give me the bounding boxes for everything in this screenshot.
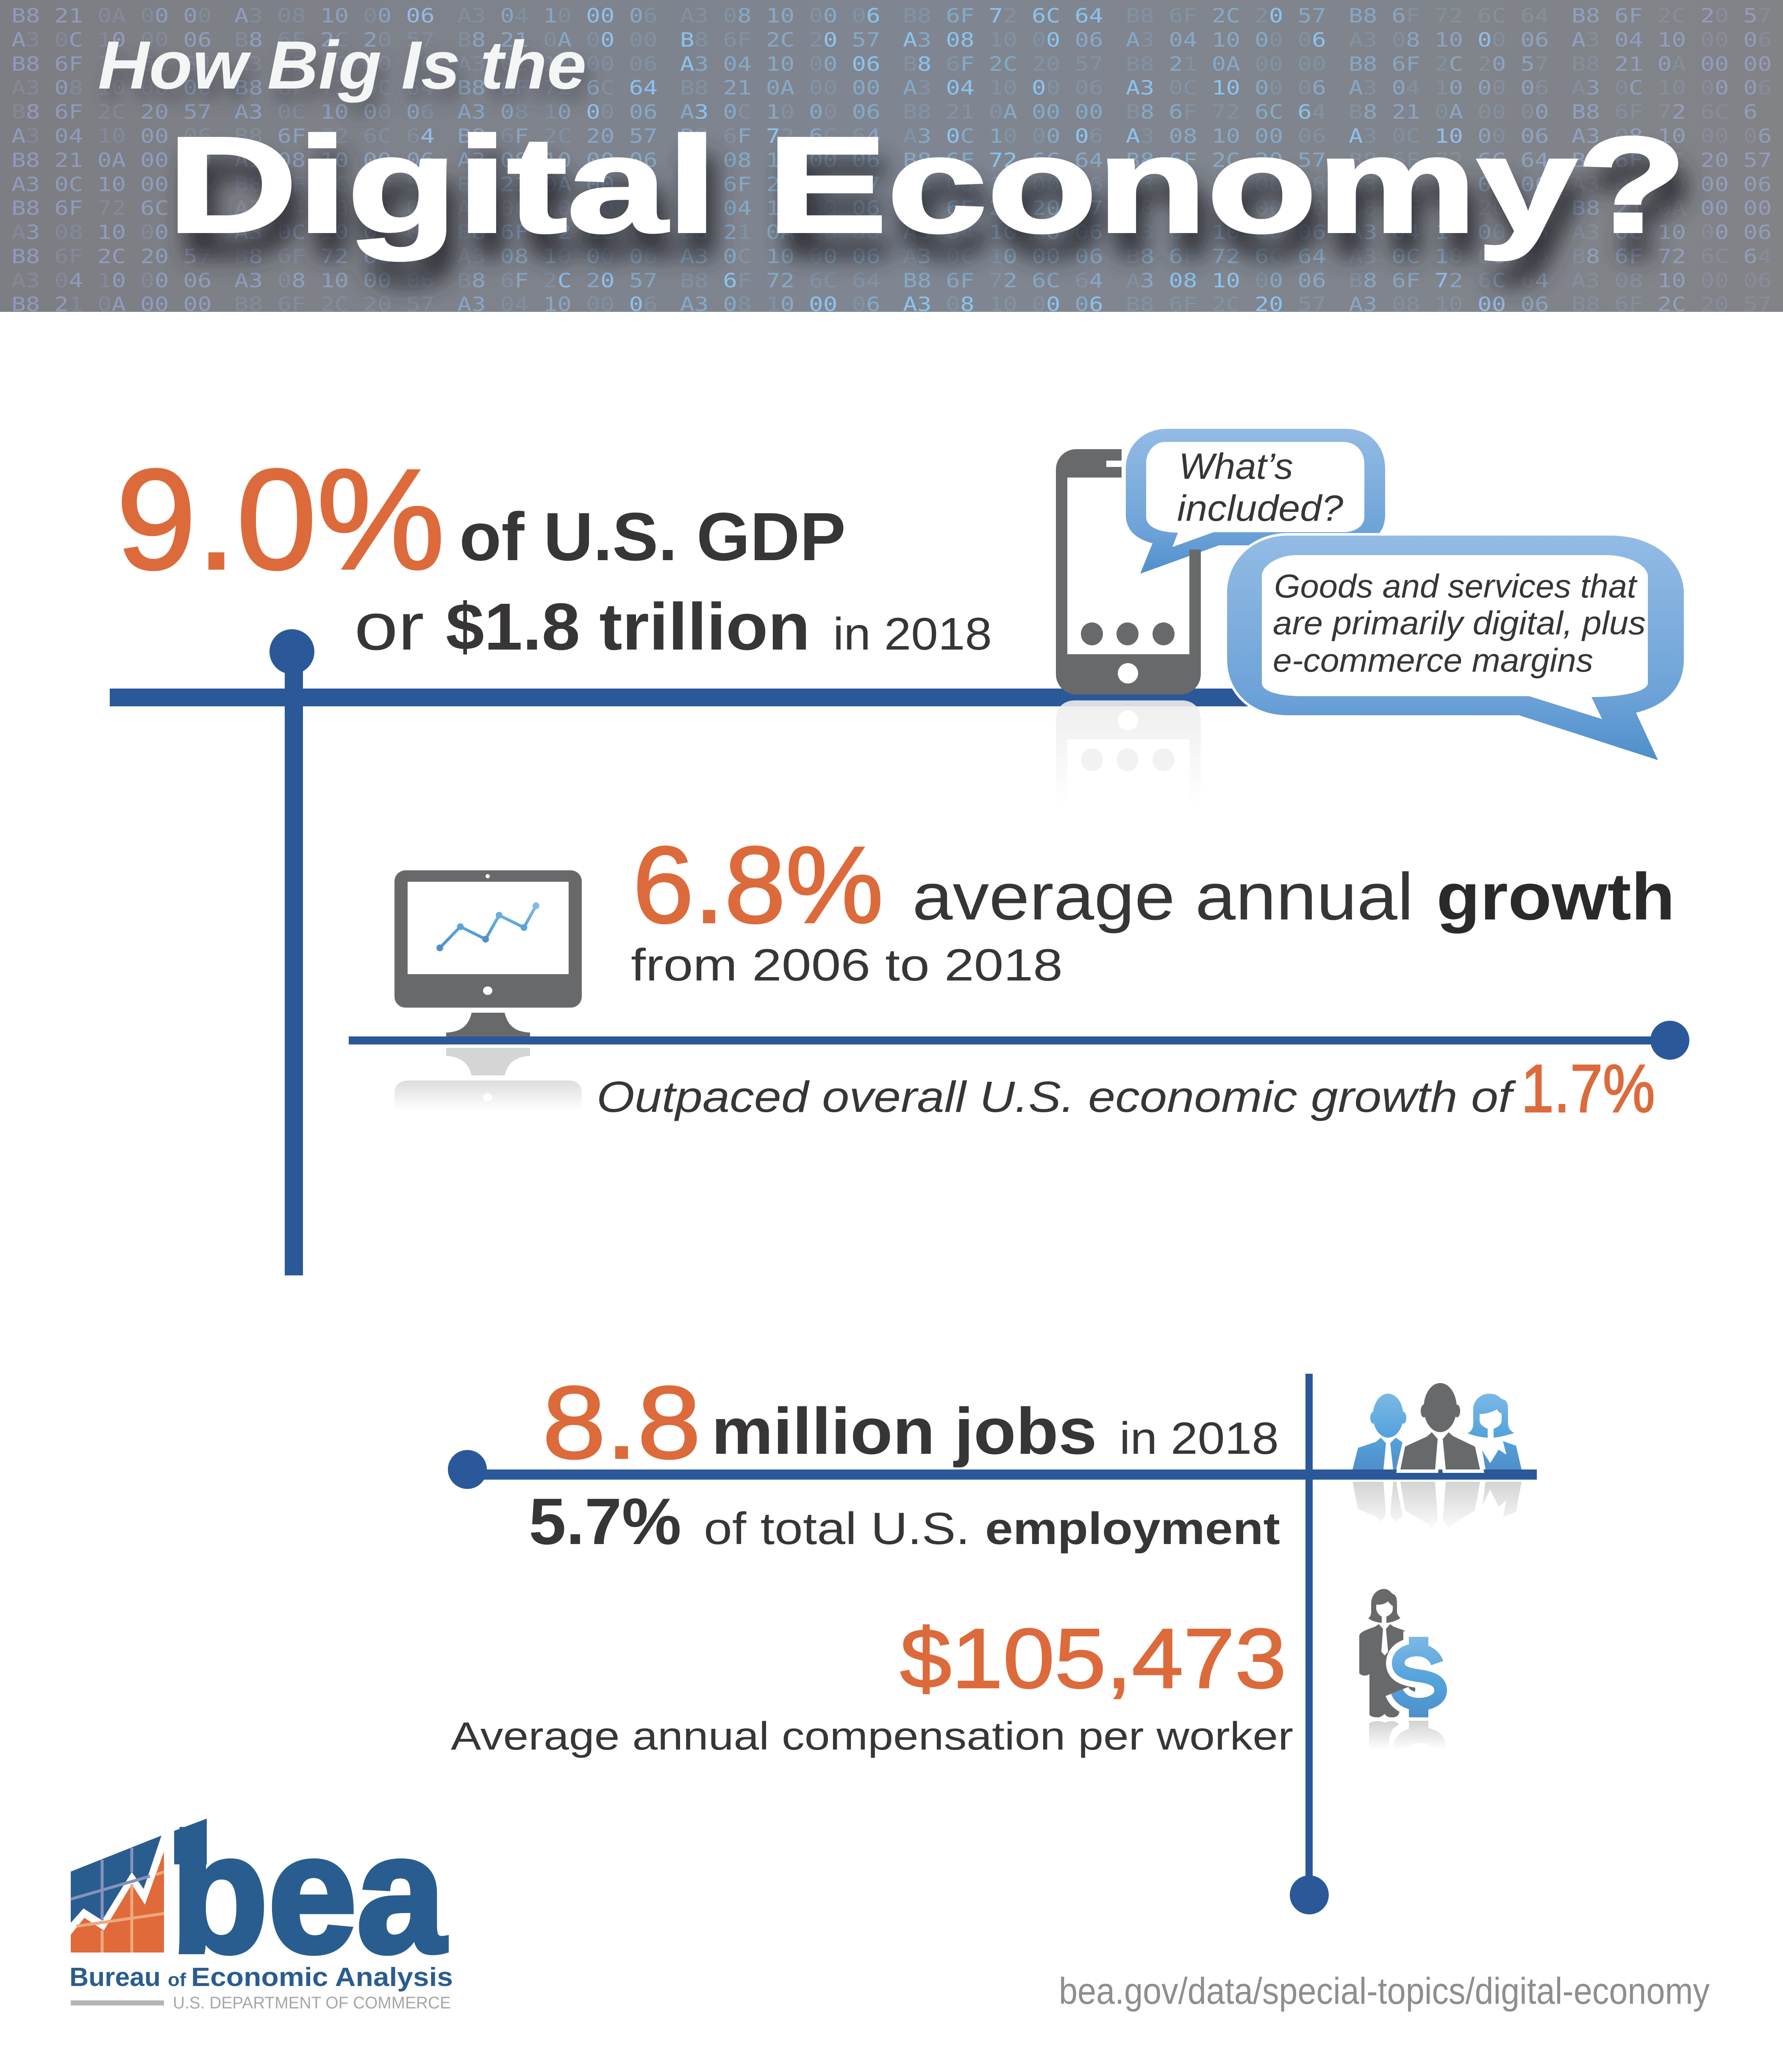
logo name: Economic Analysis [191, 1963, 453, 1992]
hex code background pattern: B8 6F 72 6C 6 [1572, 101, 1758, 124]
title: Digital Economy?: Digital Economy? [167, 109, 1687, 261]
hex code background pattern: B8 6F 2C 20 57 [234, 173, 435, 196]
hex code background pattern: B8 21 0A 00 00 [1349, 101, 1549, 124]
hex code background pattern: B8 6F 2C 20 57 [903, 197, 1103, 220]
hex code background pattern: B8 21 0A 00 00 [11, 293, 212, 316]
line chart on screen [436, 903, 539, 951]
timeline structure: top horizontal and vertical rule with dot [110, 629, 1262, 1275]
hex code background pattern: A3 08 10 00 06 [234, 5, 435, 28]
hex code background pattern: A3 04 10 00 06 [680, 53, 880, 76]
hex code background pattern: A3 0C 10 00 06 [457, 197, 658, 220]
growth timeline rule with dot [349, 1021, 1689, 1060]
hex code background pattern: A3 0C 10 00 06 [1126, 221, 1326, 244]
hex code background pattern: A3 08 10 00 06 [1349, 173, 1549, 196]
phone reflection [1056, 700, 1201, 811]
hex code background pattern: B8 21 0A 00 00 [680, 221, 880, 244]
speech bubble: Goods and services: e-commerce margins [1273, 642, 1593, 679]
hex code background pattern: A3 0C 10 00 06 [457, 53, 658, 76]
hex code background pattern: A3 08 10 00 06 [680, 149, 880, 172]
hex code background pattern: B8 6F 72 6C 64 [1349, 269, 1549, 292]
logo name [69, 1963, 453, 1992]
text: Outpaced overall U.S. economic growth of 1.7% [597, 1050, 1655, 1126]
hex code background pattern: A3 08 10 00 06 [234, 269, 435, 292]
icon: smartphone with reflection [1056, 445, 1206, 811]
stat: 6.8% average annual growth [633, 824, 1675, 946]
text: from 2006 to 2018: from 2006 to 2018 [631, 939, 1063, 990]
hex code background pattern: A3 04 10 00 06 [234, 197, 435, 220]
hex code background pattern: A3 0C 10 00 06 [234, 221, 435, 244]
hex code background pattern: A3 08 10 00 06 [234, 53, 435, 76]
logo name: of [168, 1969, 186, 1990]
woman [1467, 1394, 1522, 1469]
hex code background pattern: B8 21 0A 00 00 [1126, 53, 1326, 76]
stat: 9.0% of U.S. GDP [116, 440, 846, 599]
stat: 8.8 million jobs in 2018 [542, 1365, 1279, 1480]
icon: three business people with reflection [1353, 1383, 1522, 1529]
hex code background pattern: A3 04 10 00 06 [457, 293, 658, 316]
hex code background pattern: B8 6F 2C 20 57 [457, 269, 658, 292]
hex code background pattern: B8 6F 72 6C 64 [1349, 149, 1549, 172]
hex code background pattern: B8 6F 2C 20 57 [234, 29, 435, 52]
hex code background pattern: A3 04 10 00 06 [1126, 173, 1326, 196]
hex code background pattern: A3 08 10 00 06 [1126, 269, 1326, 292]
hex code background pattern: B8 21 0A 00 00 [680, 77, 880, 100]
hex code background pattern: B8 21 0A 00 00 [457, 29, 658, 52]
hex code background pattern: A3 08 10 00 06 [234, 149, 435, 172]
footer url: bea.gov/data/special-topics/digital-economy [1059, 1970, 1710, 2012]
hex code background pattern: A3 08 10 00 06 [457, 245, 658, 268]
hex code background pattern: A3 0C 10 00 06 [1349, 125, 1549, 148]
hex code background pattern: A3 0C 10 00 06 [903, 245, 1103, 268]
stat: 5.7% of total U.S. employment: employment [985, 1503, 1280, 1554]
hex code background pattern: A3 08 10 00 06 [680, 293, 880, 316]
hex code background pattern: A3 04 10 00 06 [1126, 29, 1326, 52]
hex code background pattern: B8 6F 72 6C 64 [1126, 245, 1326, 268]
hex code background pattern: A3 04 10 00 06 [1349, 77, 1549, 100]
hex code background pattern: B8 6F 72 6C 64 [680, 125, 880, 148]
text: Outpaced overall U.S. economic growth of 1.7%: 1.7% [1521, 1050, 1655, 1126]
hex code background pattern: B8 6F 2C 20 57 [1572, 149, 1772, 172]
subtitle: How Big Is the: How Big Is the [98, 27, 586, 103]
people reflection [1353, 1482, 1522, 1529]
logo: Bureau of Economic Analysis [69, 1800, 453, 2012]
stat: 6.8% average annual growth: average annual [912, 860, 1414, 934]
left man [1353, 1394, 1406, 1469]
hex code background pattern: B8 6F 72 6C 64 [1349, 5, 1549, 28]
stat: 8.8 million jobs in 2018: million jobs [711, 1394, 1097, 1468]
hex code background pattern: A3 0C 10 00 06 [11, 173, 212, 196]
hex code background pattern: A3 04 10 00 06 [1349, 221, 1549, 244]
header banner [0, 0, 1783, 316]
hex code background pattern: B8 6F 2C 20 57 [1349, 197, 1549, 220]
hex code background pattern: B8 21 0A 00 00 [457, 173, 658, 196]
hex code background pattern: A3 08 10 00 06 [1126, 125, 1326, 148]
hex code background pattern: A3 08 10 00 06 [11, 221, 212, 244]
hex code background pattern: A3 0C 10 00 06 [11, 29, 212, 52]
hex code background pattern: A3 08 10 00 06 [680, 5, 880, 28]
logo wordmark bea: bea [171, 1800, 446, 1988]
hex code background pattern: A3 04 10 00 06 [457, 5, 658, 28]
hex code background pattern: A3 04 10 00 06 [11, 269, 212, 292]
speech bubble: What's included?: included? [1177, 488, 1343, 529]
hex code background pattern: A3 08 10 00 06 [457, 149, 658, 172]
hex code background pattern: B8 21 0A 00 00 [11, 5, 212, 28]
hex code background pattern: A3 08 10 00 06 [903, 29, 1103, 52]
hex code background pattern [11, 5, 1772, 316]
hex code background pattern: B8 6F 72 6C 64 [1126, 101, 1326, 124]
of U.S. GDP label: of U.S. GDP [459, 499, 846, 575]
text: Outpaced overall U.S. economic growth of 1.7%: Outpaced overall U.S. economic growth of [597, 1072, 1516, 1121]
stat: 8.8 million jobs in 2018: 8.8 [542, 1365, 701, 1480]
hex code background pattern: A3 08 10 00 06 [457, 101, 658, 124]
hex code background pattern: A3 08 10 00 06 [1572, 269, 1772, 292]
hex code background pattern: B8 6F 2C 20 57 [1126, 5, 1326, 28]
speech bubble: What's included?: What’s [1179, 446, 1293, 487]
hex code background pattern: B8 6F 72 6C 64 [1572, 245, 1772, 268]
hex code background pattern: A3 0C 10 00 06 [903, 125, 1103, 148]
hex code background pattern: B8 6F 2C 20 57 [457, 125, 658, 148]
hex code background pattern: B8 6F 72 6C 64 [11, 197, 212, 220]
hex code background pattern: B8 21 0A 00 00 [11, 149, 212, 172]
hex code background pattern: B8 21 0A 00 00 [1572, 53, 1772, 76]
hex code background pattern: A3 08 10 00 06 [11, 77, 212, 100]
stat: or $1.8 trillion in 2018 [354, 589, 992, 664]
hex code background pattern: B8 6F 72 6C 64 [11, 53, 212, 76]
hex code background pattern: A3 08 10 00 06 [1349, 29, 1549, 52]
logo chart mark [71, 1836, 164, 1953]
hex code background pattern: A3 0C 10 00 06 [234, 101, 435, 124]
hex code background pattern: A3 04 10 00 06 [903, 221, 1103, 244]
center man [1400, 1383, 1480, 1469]
hex code background pattern: B8 6F 72 6C 64 [234, 125, 435, 148]
hex code background pattern: B8 6F 72 6C 64 [680, 269, 880, 292]
hex code background pattern: B8 6F 2C 20 57 [1572, 293, 1772, 316]
hex code background pattern: A3 08 10 00 06 [1572, 173, 1772, 196]
hex code background pattern: B8 6F 2C 20 57 [903, 53, 1103, 76]
hex code background pattern: B8 6F 2C 20 57 [1126, 149, 1326, 172]
speech bubble: Goods and services: are primarily digital, plus [1273, 604, 1646, 642]
hex code background pattern: A3 0C 10 00 06 [1349, 245, 1549, 268]
logo department line: U.S. DEPARTMENT OF COMMERCE [173, 1994, 451, 2012]
hex code background pattern: B8 6F 2C 20 57 [680, 173, 880, 196]
stat: 6.8% average annual growth: 6.8% [633, 824, 883, 946]
hex code background pattern: B8 6F 2C 20 57 [234, 293, 435, 316]
hex code background pattern: A3 04 10 00 06 [903, 77, 1103, 100]
hex code background pattern: B8 6F 72 6C 64 [903, 269, 1103, 292]
hex code background pattern: A3 08 10 00 06 [903, 173, 1103, 196]
stat: or $1.8 trillion in 2018: or [354, 589, 424, 664]
stat: $105,473: $105,473 [900, 1611, 1286, 1706]
jobs timeline rules with dots [448, 1374, 1537, 1914]
reflection [1369, 1721, 1446, 1750]
stat: 5.7% of total U.S. employment [529, 1485, 1280, 1558]
hex code background pattern: A3 08 10 00 06 [903, 293, 1103, 316]
hex code background pattern: B8 6F 2C 20 57 [1572, 5, 1772, 28]
hex code background pattern: B8 6F 72 6C 64 [457, 221, 658, 244]
hex code background pattern: B8 6F 2C 20 57 [11, 245, 212, 268]
speech bubble: Goods and services [1227, 536, 1684, 760]
hex code background pattern: B8 21 0A 00 00 [1572, 197, 1772, 220]
hex code background pattern: B8 21 0A 00 00 [903, 101, 1103, 124]
hex code background pattern: B8 6F 2C 20 57 [11, 101, 212, 124]
hex code background pattern: A3 08 10 00 06 [1349, 293, 1549, 316]
hex code background pattern: A3 08 10 00 06 [1572, 125, 1772, 148]
stat: or $1.8 trillion in 2018: $1.8 trillion [446, 590, 810, 664]
worker figure [1359, 1589, 1415, 1717]
stat: 6.8% average annual growth: growth [1436, 860, 1675, 934]
stat: 5.7% of total U.S. employment: of total U.S. [704, 1503, 970, 1554]
hex code background pattern: B8 6F 72 6C 64 [903, 149, 1103, 172]
big number 9.0%: 9.0% [116, 440, 445, 599]
icon: desktop monitor with line chart and reflection [394, 870, 582, 1110]
monitor reflection [394, 1048, 582, 1110]
speech bubble: What's included? [1126, 429, 1385, 574]
hex code background pattern: A3 0C 10 00 06 [1572, 221, 1772, 244]
hex code background pattern: B8 21 0A 00 00 [1126, 197, 1326, 220]
hex code background pattern: A3 0C 10 00 06 [1126, 77, 1326, 100]
hex code background pattern: B8 6F 72 6C 64 [234, 245, 435, 268]
speech bubble: Goods and services: Goods and services that [1274, 567, 1638, 605]
hex code background pattern: B8 6F 72 6C 64 [234, 77, 435, 100]
dollar sign [1397, 1631, 1441, 1717]
logo name: Bureau [69, 1963, 161, 1992]
hex code background pattern: B8 6F 72 6C 64 [457, 77, 658, 100]
hex code background pattern: A3 0C 10 00 06 [680, 101, 880, 124]
hex code background pattern: A3 04 10 00 06 [1572, 29, 1772, 52]
hex code background pattern: B8 6F 72 6C 64 [903, 5, 1103, 28]
hex code background pattern: A3 04 10 00 06 [11, 125, 212, 148]
hex code background pattern: B8 6F 2C 20 57 [1126, 293, 1326, 316]
text: Average annual compensation per worker: Average annual compensation per worker [451, 1714, 1293, 1758]
hex code background pattern: A3 0C 10 00 06 [1572, 77, 1772, 100]
stat: 8.8 million jobs in 2018: in 2018 [1119, 1413, 1279, 1464]
hex code background pattern: A3 04 10 00 06 [680, 197, 880, 220]
stat: or $1.8 trillion in 2018: in 2018 [833, 608, 992, 659]
hex code background pattern: B8 6F 2C 20 57 [1349, 53, 1549, 76]
hex code background pattern: A3 0C 10 00 06 [680, 245, 880, 268]
stat: 5.7% of total U.S. employment: 5.7% [529, 1485, 681, 1558]
icon: worker with dollar sign and reflection [1359, 1589, 1446, 1750]
hex code background pattern: B8 6F 2C 20 57 [680, 29, 880, 52]
